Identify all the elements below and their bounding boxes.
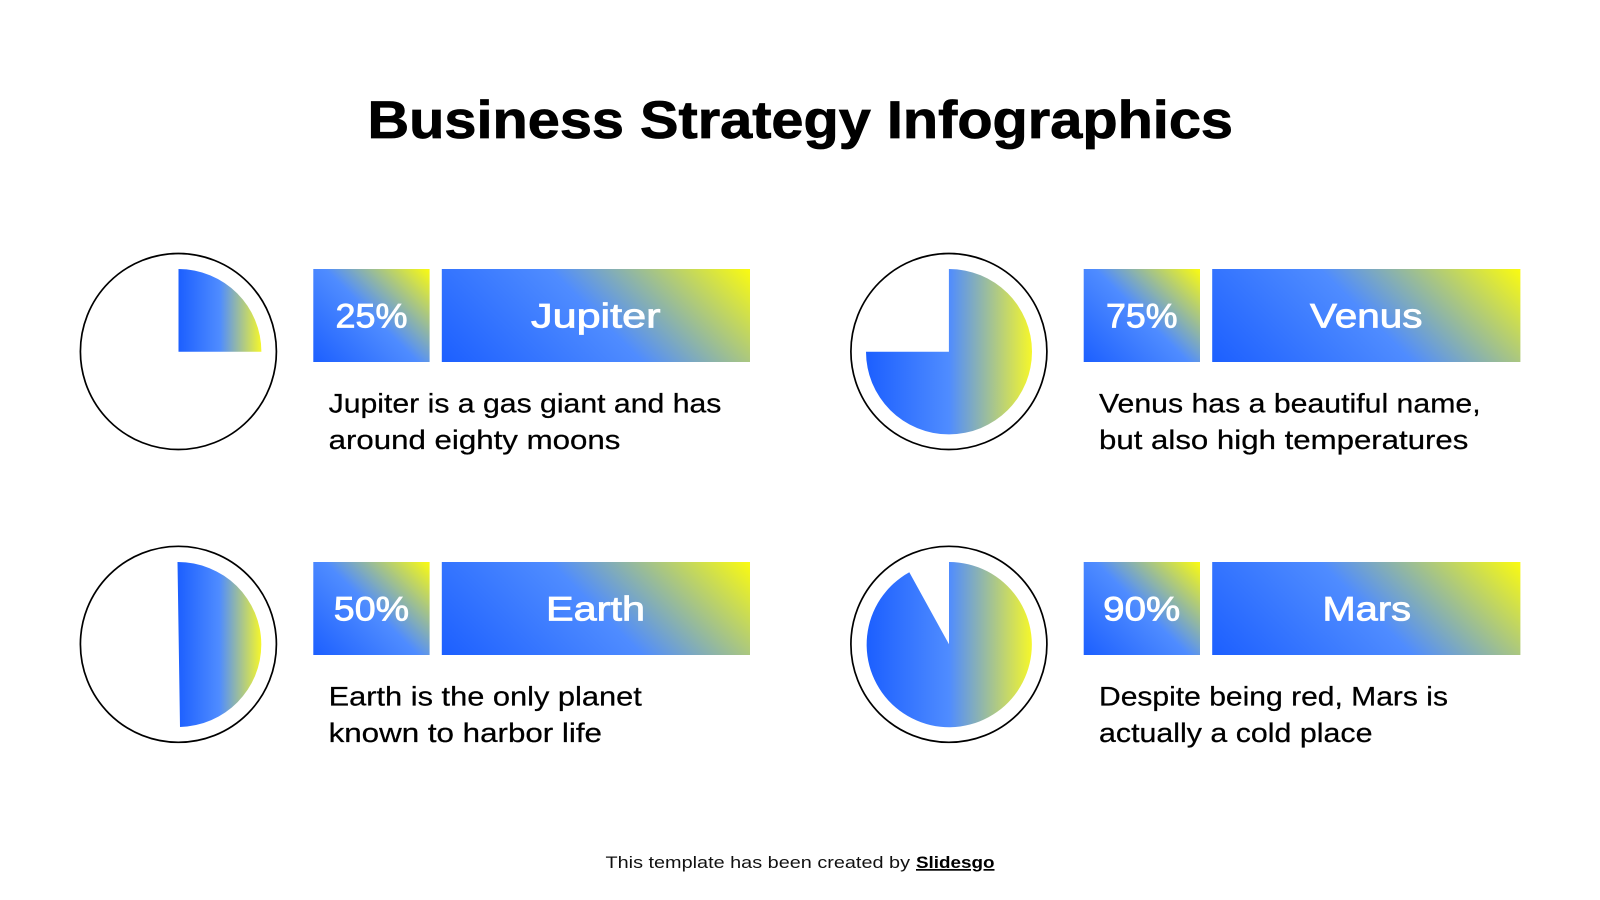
percentage badge: 25%: 25% [336,298,408,336]
footer credit: This template has been created by [606,853,911,872]
description: Mars: Despite being red, Mars is [1099,682,1448,712]
name bar: Earth: Earth [546,591,645,629]
name bar: Venus [1212,269,1520,362]
percentage badge: 50% [313,562,430,655]
pie chart: 90% [851,546,1047,742]
name bar: Jupiter: Jupiter [531,298,660,336]
panel: Earth [80,546,750,748]
description: Earth: Earth is the only planet [329,682,643,712]
description: Venus: but also high temperatures [1099,425,1468,455]
title: Business Strategy Infographics [368,91,1233,150]
description: Mars: actually a cold place [1099,718,1372,748]
percentage badge: 25% [313,269,430,362]
description: Venus [1099,388,1481,455]
pie chart: 75% [851,254,1047,450]
percentage badge: 50%: 50% [334,591,409,629]
description: Earth [329,682,643,748]
description: Earth: known to harbor life [329,718,602,748]
percentage badge: 75% [1084,269,1200,362]
percentage badge: 90% [1084,562,1200,655]
name bar: Jupiter [442,269,750,362]
panel: Mars [851,546,1520,748]
description: Jupiter: around eighty moons [329,425,620,455]
panel: Jupiter [80,254,750,455]
panel: Venus [851,254,1520,455]
name bar: Mars: Mars [1322,591,1411,629]
name bar: Earth [442,562,750,655]
percentage badge: 75%: 75% [1106,298,1178,336]
description: Mars [1099,682,1448,748]
name bar: Venus: Venus [1310,298,1422,336]
percentage badge: 90%: 90% [1103,591,1180,629]
pie chart: 25% [80,254,276,450]
description: Venus: Venus has a beautiful name, [1099,388,1481,418]
description: Jupiter [329,388,721,455]
pie chart: 50% [80,546,276,742]
footer credit [606,853,994,872]
footer credit: Slidesgo [916,853,994,872]
name bar: Mars [1212,562,1520,655]
description: Jupiter: Jupiter is a gas giant and has [329,388,721,418]
